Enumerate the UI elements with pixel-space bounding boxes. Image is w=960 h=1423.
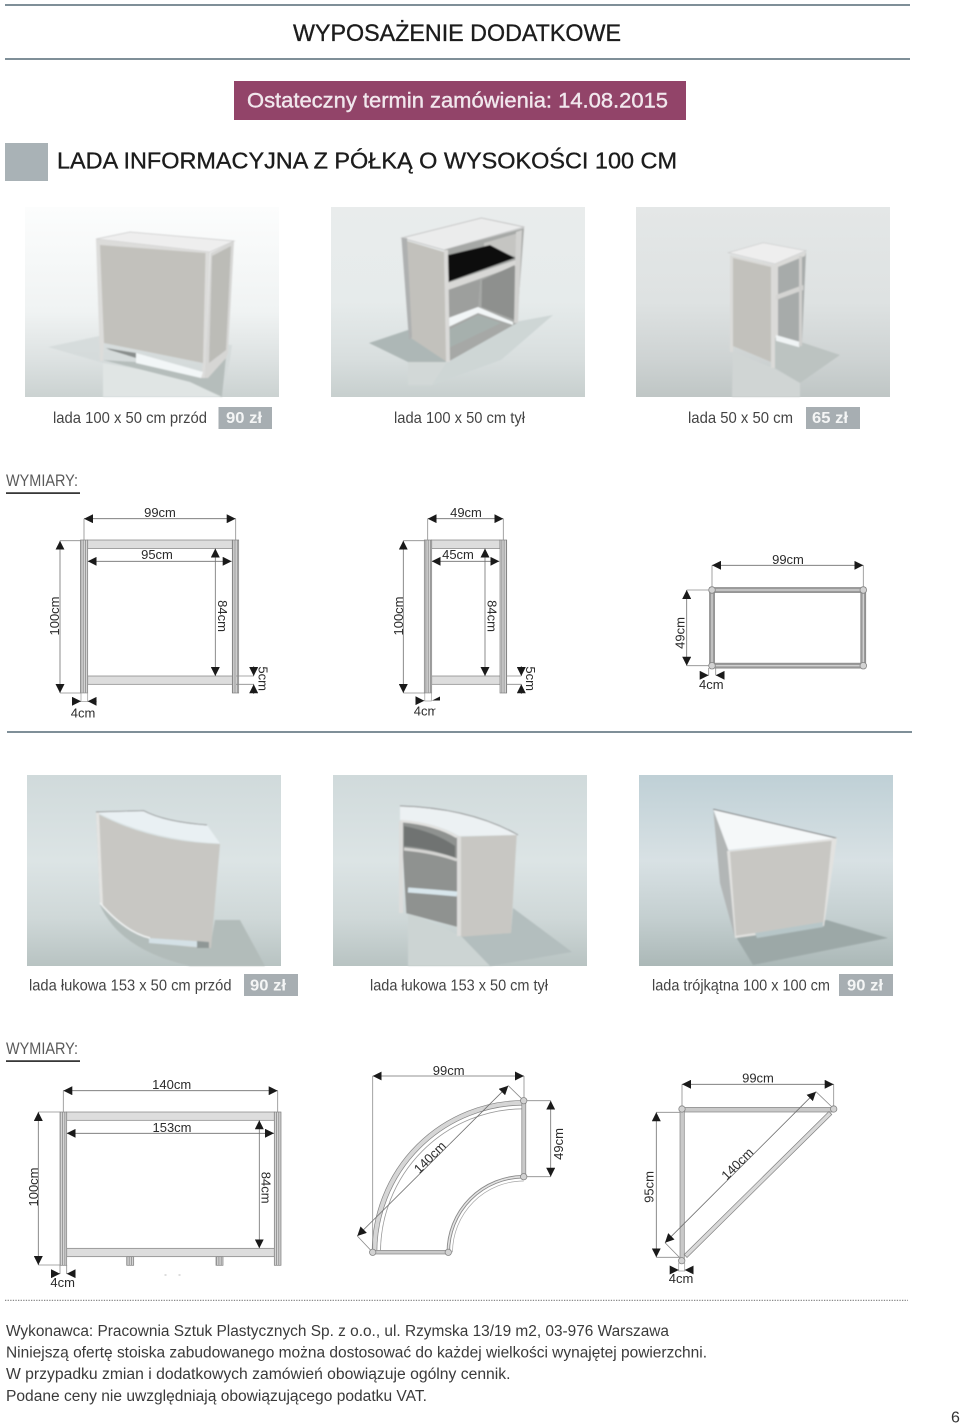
deadline banner: Ostateczny termin zamówienia: 14.08.2015 (247, 88, 668, 112)
diagram: curved counter front dimensions (26, 1077, 281, 1290)
photo: curved counter front (27, 775, 281, 966)
diagram: triangular counter top view: 4cm (669, 1271, 693, 1286)
deadline banner (234, 81, 686, 120)
label: triangular counter with price: lada trójkątna 100 x 100 cm (652, 978, 830, 994)
diagram: counter side dimensions: 45cm (442, 547, 474, 562)
section heading: LADA INFORMACYJNA Z PÓŁKĄ O WYSOKOŚCI 100 CM (57, 146, 677, 174)
icon: section square (5, 143, 48, 181)
diagram: counter front dimensions: 4cm (71, 706, 95, 720)
photo: triangular counter (639, 775, 893, 966)
label: curved counter front with price: lada łukowa 153 x 50 cm przód (29, 978, 232, 994)
heading: dimensions row 1: WYMIARY: (6, 471, 78, 490)
diagram: curved counter top view: 99cm (433, 1063, 465, 1078)
diagram: triangular counter top view: 140cm (718, 1145, 756, 1183)
footer text block: Wykonawca: Pracownia Sztuk Plastycznych Sp. z o.o., ul. Rzymska 13/19 m2, 03-976 Warszawa (6, 1323, 669, 1340)
label: curved counter front with price: 90 zł (250, 978, 287, 994)
diagram: curved counter top view: 140cm (411, 1138, 449, 1176)
label: triangular counter with price (652, 974, 893, 996)
footer text block: W przypadku zmian i dodatkowych zamówień obowiązuje ogólny cennik. (6, 1366, 511, 1383)
diagram: triangular counter top view: 99cm (742, 1071, 774, 1086)
photo: counter 50 x 50 (636, 207, 890, 397)
diagram: counter top view: 99cm (772, 552, 804, 567)
label: counter 50 x 50 with price: 65 zł (812, 410, 849, 427)
label: curved counter back: lada łukowa 153 x 50 cm tył (370, 978, 548, 994)
footer text block: Niniejszą ofertę stoiska zabudowanego można dostosować do każdej wielkości wynajętej powierzchni. (6, 1344, 707, 1362)
diagram: counter top view (672, 552, 867, 692)
photo: counter 100 x 50 back (331, 207, 585, 397)
diagram: triangular counter top view: 95cm (642, 1171, 656, 1203)
label: counter 100 x 50 back: lada 100 x 50 cm tył (394, 410, 525, 427)
diagram: counter front dimensions: 95cm (141, 547, 173, 562)
diagram: curved counter front dimensions: 153cm (152, 1120, 192, 1135)
diagram: curved counter top view: 49cm (551, 1128, 566, 1160)
label: curved counter front with price (29, 974, 298, 996)
label: counter 50 x 50 with price: lada 50 x 50 cm (688, 410, 793, 427)
diagram: counter side dimensions: 100cm (391, 596, 406, 636)
diagram: curved counter front dimensions: 140cm (152, 1077, 191, 1092)
diagram: curved counter top view (357, 1063, 566, 1256)
diagram: counter front dimensions (47, 505, 270, 720)
diagram: counter side dimensions: 84cm (485, 600, 500, 632)
page header rules (5, 4, 910, 60)
diagram: counter side dimensions: 5cm (523, 666, 538, 691)
diagram: counter front dimensions: 5cm (256, 666, 270, 691)
title: WYPOSAŻENIE DODATKOWE (293, 20, 621, 47)
diagram: counter front dimensions: 100cm (47, 596, 62, 636)
label: triangular counter with price: 90 zł (847, 978, 884, 994)
label: counter 100 x 50 front with price (53, 407, 272, 429)
diagram: triangular counter top view (642, 1071, 837, 1286)
photo: counter 100 x 50 front (25, 207, 279, 397)
diagram: counter top view: 49cm (672, 617, 687, 649)
diagram: counter side dimensions: 49cm (450, 505, 482, 520)
label: counter 100 x 50 front with price: 90 zł (226, 410, 263, 427)
photo: curved counter back (333, 775, 587, 966)
diagram: counter top view: 4cm (699, 677, 724, 692)
footer text block (6, 1323, 707, 1405)
diagram: counter front dimensions: 84cm (215, 600, 230, 632)
divider rule (7, 731, 912, 733)
footer text block: Podane ceny nie uwzględniają obowiązującego podatku VAT. (6, 1388, 427, 1405)
diagram: counter side dimensions: 4cm (414, 704, 438, 718)
label: counter 100 x 50 front with price: lada 100 x 50 cm przód (53, 410, 207, 427)
diagram: curved counter front dimensions: 84cm (259, 1172, 274, 1204)
dotted divider (5, 1299, 908, 1301)
diagram: curved counter front dimensions: 100cm (26, 1167, 41, 1207)
label: counter 50 x 50 with price (688, 407, 860, 429)
diagram: counter front dimensions: 99cm (144, 505, 176, 520)
diagram: curved counter front dimensions: 4cm (50, 1275, 75, 1290)
heading: dimensions row 2: WYMIARY: (6, 1039, 78, 1058)
diagram: counter side dimensions (391, 505, 538, 718)
